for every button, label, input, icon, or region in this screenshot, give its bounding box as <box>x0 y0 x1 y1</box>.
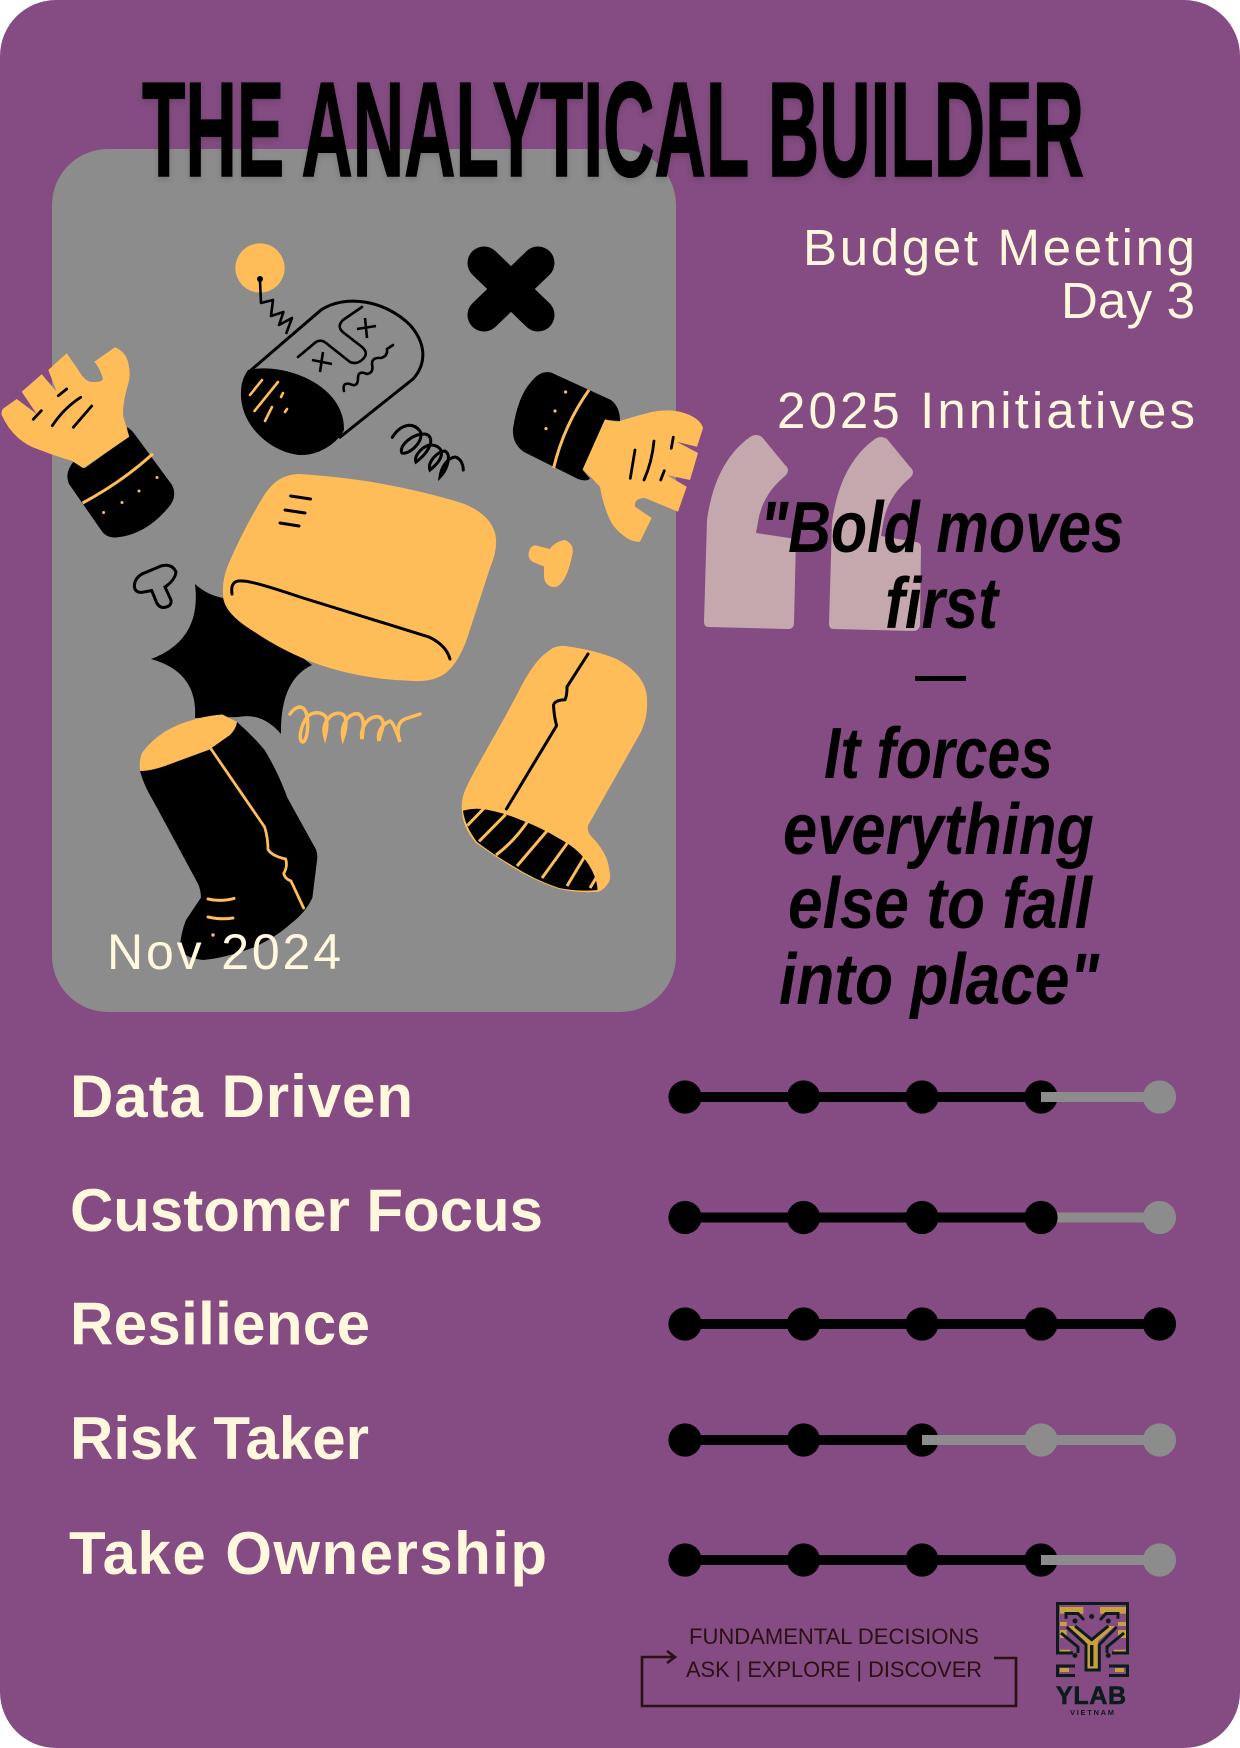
icon: orange pillow torso <box>223 474 496 681</box>
icon: quotation mark <box>704 435 921 631</box>
skill rating: Data Driven <box>70 1063 1176 1130</box>
text: tagline: ASK | EXPLORE | DISCOVER <box>686 1657 982 1682</box>
slider: 4 of 5 <box>668 1201 1176 1234</box>
icon: black star torso <box>151 584 312 734</box>
icon: orange mushroom <box>529 540 573 587</box>
icon: light bulb <box>235 243 292 334</box>
text block: quote: into place" <box>779 940 1100 1020</box>
footer tagline <box>642 1624 1016 1706</box>
text block: quote <box>760 488 1124 1020</box>
text block: quote: everything <box>783 790 1094 870</box>
icon: black boot <box>140 714 317 960</box>
skill rating: Customer Focus <box>70 1177 1176 1244</box>
text block: quote: It forces <box>824 714 1053 794</box>
label: Customer Focus: Customer Focus <box>70 1177 543 1244</box>
logo: YLAB Vietnam <box>1056 1604 1128 1717</box>
skill rating: Risk Taker <box>70 1405 1176 1472</box>
text block: meeting subtitle: Day 3 <box>1061 272 1195 329</box>
text: YLAB: YLAB <box>1056 1682 1126 1710</box>
icon: robot head <box>241 301 423 455</box>
date label: Nov 2024 <box>107 924 341 980</box>
icon: black spring <box>392 425 463 477</box>
icon: orange boot <box>462 646 647 892</box>
text: tagline <box>686 1624 982 1682</box>
text block: quote: first <box>885 564 1001 644</box>
label: Take Ownership: Take Ownership <box>69 1520 547 1587</box>
icon: orange spring <box>290 707 420 742</box>
label: Risk Taker: Risk Taker <box>70 1405 369 1472</box>
icon: logo mark <box>1058 1604 1128 1676</box>
icon: right hand and cuff <box>513 372 703 542</box>
panel: illustration backdrop <box>52 149 676 1012</box>
text: tagline: FUNDAMENTAL DECISIONS <box>689 1624 979 1649</box>
illustration: deconstructed figure <box>2 243 703 960</box>
text block: quote: "Bold moves <box>760 488 1124 568</box>
text: VIETNAM: VIETNAM <box>1070 1708 1114 1717</box>
slider: 3 of 5 <box>668 1423 1176 1457</box>
text block: initiatives: 2025 Innitiatives <box>777 382 1195 439</box>
icon: outlined mushroom <box>134 565 176 608</box>
label: Resilience: Resilience <box>70 1290 370 1358</box>
slider: 5 of 5 <box>668 1307 1176 1341</box>
text block: quote: else to fall <box>788 864 1094 944</box>
slider: 4 of 5 <box>668 1080 1176 1114</box>
label: Data Driven: Data Driven <box>70 1063 413 1130</box>
text block: meeting subtitle: Budget Meeting <box>803 219 1195 276</box>
icon: black cross <box>484 263 538 315</box>
icon: left hand and cuff <box>2 347 174 538</box>
text block: meeting subtitle <box>803 219 1195 329</box>
slider: 4 of 5 <box>668 1543 1176 1577</box>
skill rating: Resilience <box>70 1290 1176 1358</box>
skill rating: Take Ownership <box>69 1520 1176 1587</box>
arrow: loop <box>642 1651 1016 1706</box>
